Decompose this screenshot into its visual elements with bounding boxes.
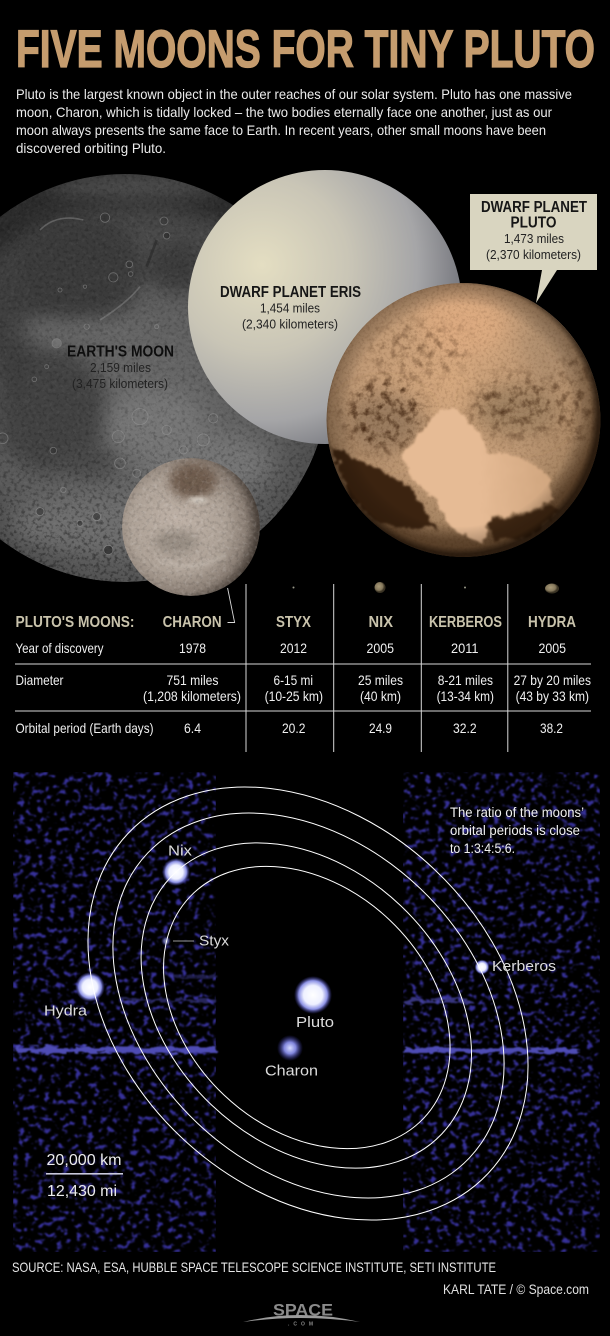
intro text: Pluto is the largest known object in the outer reaches of our solar system. Pluto has one massive xyxy=(16,86,572,102)
orbit labels: Nix xyxy=(168,842,193,860)
row: orbital period: 32.2 xyxy=(453,720,477,736)
orbit labels: Styx xyxy=(199,932,229,950)
eris label: 1,454 miles xyxy=(260,300,320,316)
callout: Pluto label xyxy=(470,194,597,303)
scale bar: 20,000 km xyxy=(46,1152,122,1169)
row: diameter: (40 km) xyxy=(360,688,401,704)
orbit labels: Hydra xyxy=(44,1002,88,1020)
moon label: EARTH'S MOON xyxy=(67,344,174,360)
eris label xyxy=(220,284,361,332)
row: year of discovery: 2012 xyxy=(280,640,307,656)
planet: Earth's Moon xyxy=(0,170,329,585)
intro text: moon always presents the same face to Earth. In recent years, other small moons have been xyxy=(16,122,546,138)
credit line: KARL TATE / © Space.com xyxy=(443,1281,589,1297)
row: diameter: 8-21 miles xyxy=(438,672,493,688)
row: year of discovery: 1978 xyxy=(179,640,206,656)
callout: Pluto label: (2,370 kilometers) xyxy=(486,247,581,262)
row: diameter: (13-34 km) xyxy=(437,688,494,704)
table headers: PLUTO'S MOONS: xyxy=(16,614,134,631)
row: orbital period: 38.2 xyxy=(540,720,563,736)
row: orbital period: 20.2 xyxy=(282,720,306,736)
mottled terrain xyxy=(336,314,593,459)
planet: Eris xyxy=(188,170,462,444)
planet: Charon xyxy=(120,456,262,598)
row: diameter: 27 by 20 miles xyxy=(514,672,591,688)
scale bar xyxy=(46,1152,123,1200)
row: diameter xyxy=(16,672,591,704)
panel: Hubble orbit image xyxy=(1,699,610,1308)
ratio note xyxy=(450,805,584,856)
orbit labels: Kerberos xyxy=(492,958,556,975)
rough southern highlands xyxy=(0,468,298,582)
table: Pluto's moons xyxy=(15,582,591,752)
eris label: (2,340 kilometers) xyxy=(242,316,338,332)
intro text: discovered orbiting Pluto. xyxy=(16,140,166,156)
row: year of discovery xyxy=(16,640,566,656)
row: diameter: 751 miles xyxy=(166,672,218,688)
logo: Space.com xyxy=(243,1300,360,1328)
moon icons xyxy=(292,582,559,594)
eris label: DWARF PLANET ERIS xyxy=(220,284,361,301)
planet: Pluto xyxy=(326,283,600,557)
logo: Space.com: SPACE xyxy=(273,1300,333,1320)
moon label: (3,475 kilometers) xyxy=(72,376,168,391)
row: orbital period xyxy=(16,720,563,736)
table headers: STYX xyxy=(276,614,311,631)
row: diameter: (1,208 kilometers) xyxy=(143,688,241,704)
row: diameter: Diameter xyxy=(16,672,64,688)
row: year of discovery: 2011 xyxy=(451,640,479,656)
source line: SOURCE: NASA, ESA, HUBBLE SPACE TELESCOPE SCIENCE INSTITUTE, SETI INSTITUTE xyxy=(12,1259,496,1275)
intro text xyxy=(16,86,572,156)
moon label xyxy=(67,344,174,391)
noise panel left xyxy=(13,772,216,1252)
row: orbital period: 24.9 xyxy=(369,720,392,736)
orbit rings xyxy=(1,699,610,1308)
bright moon blobs xyxy=(75,858,490,1061)
orbit labels: Pluto xyxy=(296,1014,334,1031)
row: diameter: (10-25 km) xyxy=(265,688,323,704)
scale bar: 12,430 mi xyxy=(47,1183,117,1200)
table headers: NIX xyxy=(368,614,393,631)
ratio note: to 1:3:4:5:6. xyxy=(450,841,515,856)
row: orbital period: Orbital period (Earth days) xyxy=(16,720,154,736)
logo: Space.com: .COM xyxy=(288,1322,313,1328)
row: year of discovery: 2005 xyxy=(538,640,566,656)
ratio note: orbital periods is close xyxy=(450,823,580,838)
moon label: 2,159 miles xyxy=(90,360,151,375)
callout: Pluto label: 1,473 miles xyxy=(504,231,564,246)
horizontal streaks xyxy=(16,975,579,1053)
callout: Pluto label: PLUTO xyxy=(510,214,556,232)
Tombaugh heart xyxy=(402,407,555,543)
ratio note: The ratio of the moons’ xyxy=(450,805,584,820)
dark whale region xyxy=(330,443,435,528)
table headers: HYDRA xyxy=(528,614,576,631)
row: year of discovery: 2005 xyxy=(366,640,394,656)
table headers: CHARON xyxy=(163,614,222,631)
orbit labels xyxy=(44,842,556,1080)
table headers: KERBEROS xyxy=(429,614,502,631)
noise panel right xyxy=(403,772,600,1252)
table headers xyxy=(16,614,576,631)
row: year of discovery: Year of discovery xyxy=(16,640,104,656)
callout: Pluto label: DWARF PLANET xyxy=(481,199,587,216)
row: diameter: 25 miles xyxy=(358,672,403,688)
row: diameter: (43 by 33 km) xyxy=(516,688,589,704)
intro text: moon, Charon, which is tidally locked – the two bodies eternally face one another, just as our xyxy=(16,104,552,120)
row: orbital period: 6.4 xyxy=(184,720,201,736)
orbit labels: Charon xyxy=(265,1062,318,1080)
row: diameter: 6-15 mi xyxy=(274,672,313,688)
